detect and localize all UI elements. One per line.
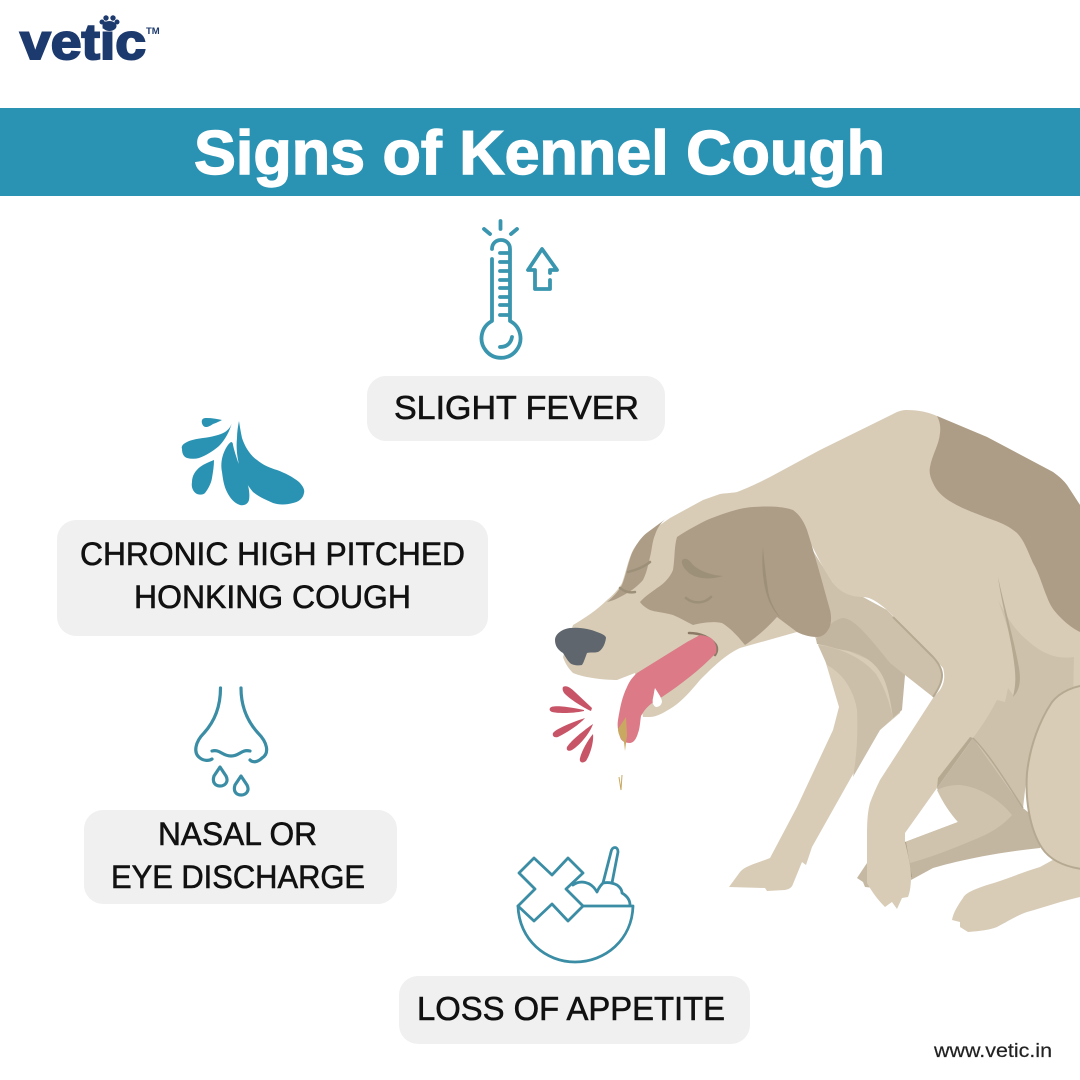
- far leg mid shade: [818, 645, 893, 777]
- icon: bowl with cross: [518, 848, 633, 962]
- hind crease: [973, 738, 1023, 808]
- mouth line: [689, 633, 717, 655]
- falling droplets: [619, 775, 622, 790]
- head: [563, 500, 830, 717]
- label: loss of appetite: [399, 976, 750, 1044]
- label: nasal or eye discharge: [84, 810, 397, 904]
- logo: vetic: vetic: [20, 14, 146, 70]
- far front leg: [729, 630, 905, 891]
- brow marks: [620, 562, 650, 592]
- neck shade: [800, 530, 942, 697]
- belly crease: [998, 577, 1020, 697]
- body: [700, 410, 1080, 909]
- white saliva drop: [653, 688, 662, 707]
- icon: cough splash: [182, 418, 304, 505]
- icon: runny nose: [196, 688, 267, 795]
- belly shade: [973, 600, 1074, 808]
- vomit drip: [618, 717, 627, 751]
- hind foot: [952, 845, 1080, 932]
- eye lower crease: [686, 597, 711, 602]
- tongue: [618, 635, 716, 743]
- ear fold: [762, 547, 780, 617]
- hind leg light: [905, 785, 1012, 863]
- website url: www.vetic.in: [933, 1041, 1052, 1062]
- label: chronic cough: HONKING COUGH: [134, 579, 411, 615]
- near leg outline shade: [893, 617, 942, 697]
- title banner: Signs of Kennel Cough: [194, 119, 885, 188]
- icon: thermometer with up arrow: [482, 221, 557, 358]
- title banner: [0, 108, 1080, 196]
- back patch: [930, 416, 1080, 632]
- closed eye: [682, 559, 723, 578]
- label: nasal or eye discharge: EYE DISCHARGE: [111, 859, 365, 895]
- hind toe behind paw: [857, 863, 875, 888]
- far leg dark shade: [816, 618, 905, 718]
- illustration: coughing dog: [550, 410, 1080, 932]
- logo: vetic: TM: [146, 26, 160, 37]
- hind leg dark: [905, 738, 1050, 880]
- ear and face patch: [640, 506, 831, 645]
- label: chronic cough: CHRONIC HIGH PITCHED: [80, 536, 465, 572]
- forehead patch: [607, 518, 667, 602]
- nose: [555, 628, 606, 665]
- label: slight fever: [367, 376, 665, 441]
- cough marks: [550, 686, 593, 762]
- label: chronic cough: [57, 520, 488, 636]
- paw edge shade: [905, 842, 911, 877]
- label: loss of appetite: LOSS OF APPETITE: [417, 990, 725, 1027]
- label: slight fever: SLIGHT FEVER: [394, 389, 639, 426]
- haunch: [1027, 685, 1080, 870]
- label: nasal or eye discharge: NASAL OR: [158, 816, 317, 852]
